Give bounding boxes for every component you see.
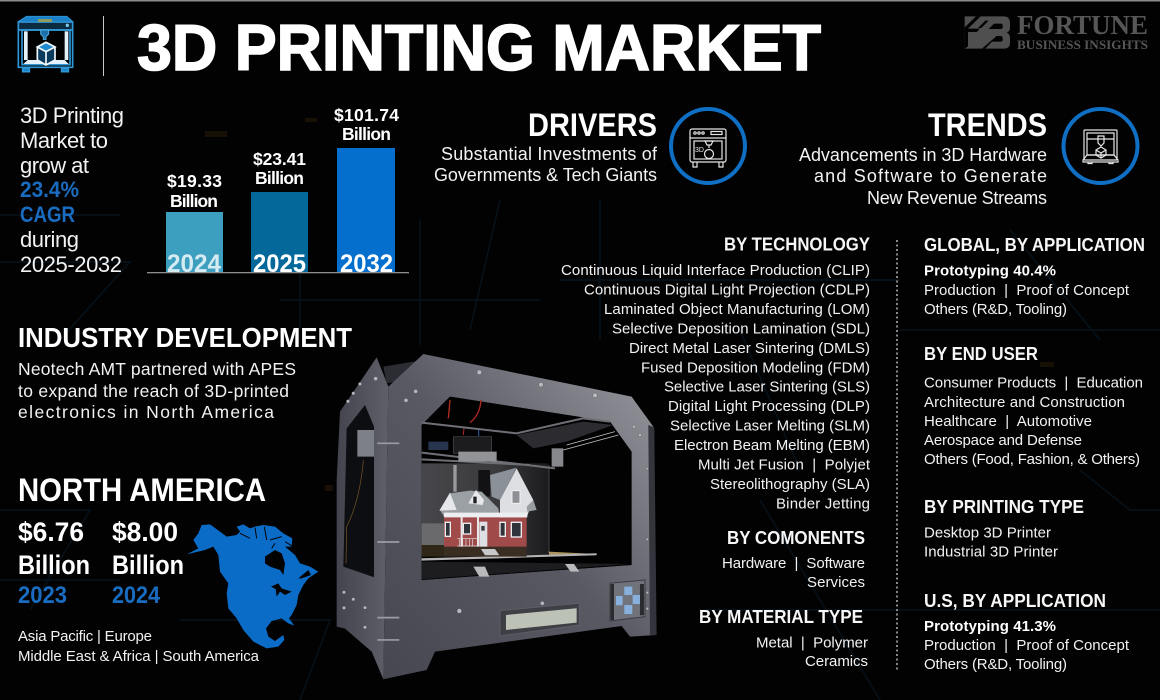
bar: 2025: [251, 149, 308, 278]
wires: [448, 400, 481, 423]
panel: by material type: [699, 607, 868, 670]
panel: by technology: Selective Deposition Lamination (SDL): [612, 320, 870, 337]
panel: north america: 2023: [18, 582, 67, 609]
panel: by technology: Selective Laser Sintering (SLS): [664, 379, 870, 396]
panel: by technology: Laminated Object Manufacturing (LOM): [604, 301, 870, 318]
logo: Fortune Business Insights: FORTUNE: [1017, 10, 1148, 40]
panel: industry development: electronics in North America: [18, 402, 274, 422]
panel: by material type: Ceramics: [805, 653, 868, 670]
column divider: [896, 240, 898, 670]
text block: CAGR statement: 23.4%: [20, 177, 79, 202]
bar: 2024: 2024: [167, 250, 221, 278]
panel: industry development: to expand the reach of 3D-printed: [18, 381, 289, 401]
panel: north america: [18, 472, 266, 665]
panel: north america: 2024: [112, 582, 161, 609]
icon: printer in circle: [671, 109, 745, 183]
panel: by printing type: Desktop 3D Printer: [924, 525, 1051, 542]
logo: Fortune Business Insights: BUSINESS INSIGHTS: [1017, 37, 1148, 52]
panel: global by application: Production | Proof of Concept: [924, 282, 1130, 299]
panel: industry development: INDUSTRY DEVELOPMENT: [18, 322, 352, 353]
bar: 2032: [334, 105, 399, 278]
panel: industry development: [18, 322, 352, 422]
panel: north america: Billion: [18, 550, 90, 580]
panel: U.S. by application: [924, 591, 1130, 673]
panel: by components: [722, 528, 865, 591]
bar: 2024: Billion: [170, 191, 218, 211]
logo mark: [965, 16, 1010, 49]
panel: drivers: [434, 107, 745, 185]
print head: [453, 437, 492, 453]
panel: by end user: Healthcare | Automotive: [924, 413, 1092, 430]
bar: 2025: Billion: [255, 168, 304, 188]
panel: north america: $6.76: [18, 517, 84, 547]
bar: 2032: Billion: [342, 124, 391, 144]
build chamber: [422, 397, 631, 580]
panel: U.S. by application: U.S, BY APPLICATION: [924, 591, 1106, 611]
panel: trends: New Revenue Streams: [867, 188, 1047, 208]
panel: by technology: Stereolithography (SLA): [710, 476, 870, 493]
icon: 3D printer logo: [18, 17, 73, 72]
panel: drivers: Substantial Investments of: [441, 144, 658, 164]
panel: U.S. by application: Prototyping 41.3%: [924, 618, 1056, 635]
panel: by end user: Aerospace and Defense: [924, 432, 1082, 449]
panel: by end user: Others (Food, Fashion, & Others): [924, 451, 1140, 468]
printer back frame: [383, 360, 423, 383]
gantry rails: [422, 418, 610, 468]
text block: CAGR statement: during: [20, 227, 79, 252]
printer side panel: [337, 357, 388, 679]
panel: by components: Hardware | Software: [722, 555, 865, 572]
icon: cube printer in circle: [1064, 109, 1138, 183]
panel: by technology: Binder Jetting: [776, 496, 870, 512]
panel: north america: Asia Pacific | Europe: [18, 628, 152, 645]
panel: U.S. by application: Others (R&D, Tooling): [924, 656, 1067, 673]
text block: CAGR statement: 2025-2032: [20, 252, 122, 277]
panel: drivers: DRIVERS: [528, 107, 657, 143]
panel: global by application: Others (R&D, Tooling): [924, 301, 1067, 318]
back wall: [422, 463, 548, 555]
LCD screen: [500, 603, 579, 636]
panel: by printing type: BY PRINTING TYPE: [924, 497, 1084, 517]
panel: industry development: Neotech AMT partnered with APES: [18, 359, 296, 379]
map: North America: [187, 524, 318, 648]
text block: CAGR statement: 3D Printing: [20, 103, 124, 128]
text block: CAGR statement: CAGR: [20, 202, 75, 227]
text block: CAGR statement: grow at: [20, 153, 89, 178]
panel: by technology: Electron Beam Melting (EBM): [674, 437, 870, 454]
panel: by end user: [924, 344, 1143, 468]
illustration: 3D printer with house: [337, 354, 657, 679]
side window: [343, 405, 374, 577]
bar: 2032: 2032: [340, 250, 393, 278]
panel: by technology: Direct Metal Laser Sintering (DMLS): [629, 340, 870, 357]
logo: Fortune Business Insights: [965, 10, 1148, 52]
panel: north america: Billion: [112, 550, 184, 580]
bar: 2024: [166, 171, 223, 278]
bar chart: market size: [147, 105, 409, 278]
bar: 2025: $23.41: [253, 149, 306, 169]
bolts: [342, 370, 649, 629]
panel: by technology: Fused Deposition Modeling (FDM): [641, 359, 870, 376]
control pad: [610, 580, 645, 621]
panel: trends: and Software to Generate: [814, 166, 1047, 186]
build plate: [548, 552, 597, 557]
panel: by end user: Architecture and Construction: [924, 394, 1125, 411]
panel: global by application: GLOBAL, BY APPLICATION: [924, 235, 1145, 255]
panel: trends: [799, 107, 1138, 208]
panel: by technology: Multi Jet Fusion | Polyjet: [698, 456, 871, 474]
panel: north america: $8.00: [112, 517, 178, 547]
panel: U.S. by application: Production | Proof of Concept: [924, 637, 1130, 654]
panel: global by application: [924, 235, 1145, 318]
panel: by components: Services: [807, 574, 865, 591]
panel: by material type: Metal | Polymer: [756, 634, 868, 652]
panel: drivers: Governments & Tech Giants: [434, 165, 657, 185]
text block: CAGR statement: Market to: [20, 128, 108, 153]
panel: north america: NORTH AMERICA: [18, 472, 266, 508]
panel: by components: BY COMONENTS: [727, 528, 865, 548]
panel: by printing type: Industrial 3D Printer: [924, 544, 1058, 561]
bar: 2024: $19.33: [167, 171, 222, 191]
panel: by technology: Digital Light Processing (DLP): [668, 398, 870, 415]
text block: CAGR statement: [20, 103, 124, 277]
panel: by end user: BY END USER: [924, 344, 1038, 364]
panel: trends: TRENDS: [928, 107, 1047, 143]
title: 3D PRINTING MARKET: [137, 11, 821, 84]
bar: 2032: $101.74: [334, 105, 399, 125]
panel: by technology: [561, 234, 871, 512]
printer front panel: [383, 354, 656, 679]
panel: trends: Advancements in 3D Hardware: [799, 145, 1047, 165]
panel: by material type: BY MATERIAL TYPE: [699, 607, 863, 627]
panel: by technology: Continuous Digital Light Projection (CDLP): [584, 282, 870, 298]
bar: 2025: 2025: [253, 250, 306, 278]
icon: printer in circle: 3D: [695, 147, 704, 154]
panel: by printing type: [924, 497, 1084, 561]
house model: [439, 468, 537, 557]
panel: by technology: Continuous Liquid Interface Production (CLIP): [561, 262, 870, 279]
panel: north america: Middle East & Africa | South America: [18, 648, 260, 665]
title divider: [103, 16, 104, 76]
panel: by end user: Consumer Products | Education: [924, 375, 1143, 392]
panel: global by application: Prototyping 40.4%: [924, 263, 1056, 280]
panel: by technology: BY TECHNOLOGY: [724, 234, 870, 254]
panel: by technology: Selective Laser Melting (SLM): [670, 418, 870, 435]
